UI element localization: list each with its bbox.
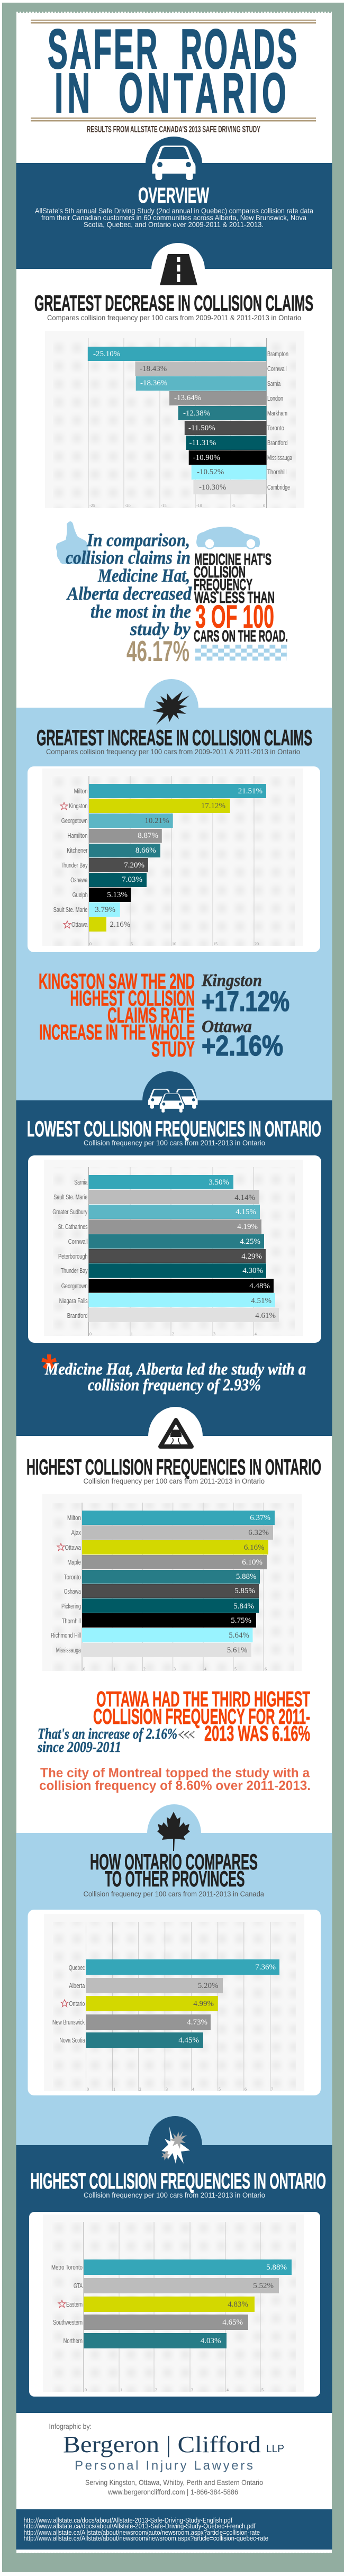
callout: collision frequency less than 3 of 100: COLLISION (194, 563, 246, 581)
overview text (35, 206, 313, 229)
callout: medicine hat led the study (41, 1346, 306, 1394)
bar chart: greatest decrease: -18.43% (140, 365, 167, 373)
bar chart: greatest increase: Kingston (69, 802, 87, 810)
callout: kingston second highest: CLAIMS RATE (107, 1003, 195, 1027)
callout: medicine hat decrease: study by (130, 619, 191, 639)
callout: montreal topped the study: collision frequency of 8.60% over 2011-2013. (39, 1778, 311, 1793)
callout: medicine hat decrease: collision claims in (66, 547, 191, 568)
bar chart: greatest decrease: -10.30% (199, 483, 226, 492)
callout: collision frequency less than 3 of 100 (194, 550, 288, 661)
callout: increase since 2009-2011: That's an increase of 2.16% (38, 1725, 177, 1742)
contact details: www.bergeronclifford.com | 1-866-384-5886 (107, 2488, 238, 2496)
callout: collision frequency less than 3 of 100: MEDICINE HAT'S (194, 550, 271, 568)
icon: white burst (148, 2116, 202, 2164)
bar chart: regions: Metro Toronto (51, 2263, 83, 2271)
bar chart: provinces: Ontario (69, 2000, 85, 2008)
bar chart: provinces: 3 (166, 2087, 168, 2092)
bar chart: highest frequencies: Toronto (64, 1573, 81, 1581)
bar chart: highest frequencies: Ajax (71, 1529, 81, 1536)
subheading: Compares collision frequency per 100 cars from 2009-2011 & 2011-2013 in Ontario (47, 313, 301, 322)
bar chart: highest frequencies: 5.61% (227, 1646, 248, 1655)
overview text: from their Canadian customers in 60 communities across Alberta, New Brunswick, Nova (41, 213, 306, 222)
source links: http://www.allstate.ca/Allstate/about/newsroom/auto/newsroom.aspx?article=collision-rate (24, 2528, 260, 2536)
bar chart: regions: Northern (64, 2337, 83, 2345)
bar chart: greatest increase (28, 766, 320, 952)
callout: medicine hat led the study: collision frequency of 2.93% (88, 1375, 261, 1394)
bar chart: lowest frequencies: 4.29% (241, 1252, 262, 1261)
bar chart: regions: 4.03% (201, 2337, 221, 2345)
callout: medicine hat decrease: 46.17% (126, 635, 189, 667)
title (31, 18, 316, 124)
bar chart: lowest frequencies: Thunder Bay (61, 1267, 88, 1275)
bar chart: greatest increase: 7.03% (122, 875, 142, 884)
bar chart: provinces: Quebec (69, 1964, 85, 1972)
bar chart: greatest increase: 0 (89, 942, 92, 946)
source links: http://www.allstate.ca/Allstate/about/newsroom/newsroom.aspx?article=collision-quebec-rate (24, 2534, 268, 2542)
bar chart: highest frequencies: Milton (67, 1514, 81, 1522)
callout: collision frequency less than 3 of 100: 3 OF 100 (195, 599, 274, 635)
bar chart: greatest decrease: -10.52% (197, 468, 224, 476)
callout: ottawa third highest (93, 1687, 310, 1746)
bar chart: greatest increase: 20 (255, 942, 259, 946)
bar chart: greatest decrease: Sarnia (267, 379, 281, 387)
logo: bergeron clifford (63, 2432, 284, 2473)
icon: side car (196, 527, 260, 548)
bar chart: greatest increase: 21.51% (238, 787, 262, 796)
bar chart: greatest increase: 10.21% (144, 817, 169, 825)
bar chart: greatest decrease: Markham (267, 409, 287, 417)
icon: car front (146, 137, 202, 180)
bar chart: highest frequencies: Oshawa (64, 1587, 81, 1595)
callout: montreal topped the study: The city of Montreal topped the study with a (40, 1766, 310, 1780)
icon: road (151, 243, 205, 285)
bar chart: greatest decrease: -18.36% (140, 379, 167, 387)
callout: kingston and ottawa increases: +17.12% (202, 986, 289, 1017)
logo: bergeron clifford: Bergeron | Clifford (63, 2432, 261, 2457)
bar chart: greatest decrease: Toronto (267, 424, 284, 432)
bar chart: provinces: 2 (139, 2087, 141, 2092)
bar chart: regions: 5.52% (253, 2282, 274, 2290)
bar chart: lowest frequencies: Greater Sudbury (52, 1208, 88, 1216)
bar chart: greatest increase: 10 (172, 942, 176, 946)
bar chart: provinces: 4.73% (187, 2018, 207, 2027)
callout: kingston and ottawa increases: Kingston (201, 971, 262, 990)
bar chart: lowest frequencies: 4.15% (236, 1208, 256, 1216)
bar chart: provinces: 5 (219, 2087, 221, 2092)
bar chart: lowest frequencies: Sault Ste. Marie (53, 1193, 87, 1201)
bar chart: highest frequencies: 5 (234, 1667, 237, 1671)
subheading: Collision frequency per 100 cars from 2011-2013 in Ontario (84, 2191, 265, 2199)
bar chart: greatest decrease: -20 (125, 503, 131, 508)
bar chart: highest frequencies: 6.16% (244, 1543, 265, 1552)
bar chart: greatest decrease: Cornwall (267, 365, 287, 373)
bar chart: highest frequencies: 2 (143, 1667, 146, 1671)
callout: collision frequency less than 3 of 100: FREQUENCY (194, 575, 252, 594)
bar chart: regions: Eastern (66, 2300, 83, 2308)
bar chart: highest frequencies: 5.75% (231, 1616, 251, 1625)
callout: kingston and ottawa increases: Ottawa (202, 1017, 252, 1036)
bar chart: greatest decrease: -11.50% (188, 424, 215, 432)
bar chart: highest frequencies: 5.85% (234, 1587, 255, 1595)
bar chart: greatest increase: 15 (213, 942, 218, 946)
bar chart: greatest decrease: Mississauga (267, 454, 293, 462)
bar chart: greatest decrease: London (267, 394, 283, 402)
bar chart: lowest frequencies: 1 (131, 1332, 133, 1336)
credit label: Infographic by: (49, 2422, 92, 2430)
bar chart: greatest decrease: -12.38% (183, 409, 210, 418)
bar chart: greatest increase: Thunder Bay (61, 861, 88, 869)
bar chart: greatest decrease: Brantford (267, 439, 288, 447)
bar chart: greatest decrease (45, 331, 304, 508)
bar chart: provinces: Alberta (69, 1982, 85, 1990)
bar chart: highest frequencies: Mississauga (56, 1646, 81, 1654)
logo: bergeron clifford: LLP (266, 2443, 284, 2455)
source links (24, 2516, 268, 2542)
bar chart: highest frequencies: 1 (113, 1667, 115, 1671)
callout: kingston second highest: INCREASE IN THE WHOLE (39, 1020, 195, 1044)
subheading: Collision frequency per 100 cars from 2011-2013 in Ontario (84, 1138, 265, 1147)
bar chart: provinces: 5.20% (198, 1982, 218, 1990)
callout: kingston second highest: KINGSTON SAW THE 2ND (39, 969, 195, 993)
bar chart: lowest frequencies: Peterborough (58, 1252, 88, 1260)
subheading: Collision frequency per 100 cars from 2011-2013 in Canada (84, 1890, 264, 1898)
bar chart: highest frequencies: 0 (83, 1667, 85, 1671)
source links: http://www.allstate.ca/docs/about/Allstate-2013-Safe-Driving-Study-English.pdf (24, 2516, 232, 2524)
bar chart: lowest frequencies: 4.61% (255, 1312, 276, 1320)
bar chart: lowest frequencies: Georgetown (61, 1282, 87, 1290)
bar chart: provinces: New Brunswick (52, 2018, 85, 2026)
bar chart: greatest increase: 2.16% (110, 920, 130, 929)
bar chart: provinces: Nova Scotia (59, 2036, 85, 2044)
overview text: AllState's 5th annual Safe Driving Study (2nd annual in Quebec) compares collision rate data (35, 206, 313, 215)
bar chart: lowest frequencies (28, 1155, 321, 1343)
bar chart: lowest frequencies: Brantford (67, 1312, 88, 1319)
callout: increase since 2009-2011: since 2009-2011 (37, 1739, 121, 1756)
bar chart: regions: 2 (155, 2388, 157, 2392)
bar chart: regions: 4.65% (222, 2318, 243, 2327)
bar chart: regions (29, 2212, 320, 2397)
bar chart: highest frequencies: 5.64% (229, 1631, 249, 1640)
contact details (85, 2478, 263, 2496)
callout: medicine hat decrease: In comparison, (86, 530, 190, 550)
bar chart: greatest decrease: -5 (232, 503, 236, 508)
bar chart: lowest frequencies: 4 (255, 1332, 257, 1336)
bar chart: greatest decrease: -25 (89, 503, 95, 508)
subheading: Compares collision frequency per 100 cars from 2009-2011 & 2011-2013 in Ontario (46, 747, 300, 756)
callout: kingston and ottawa increases (201, 971, 289, 1062)
bar chart: greatest increase: 7.20% (124, 861, 144, 870)
callout: increase since 2009-2011 (37, 1725, 194, 1756)
callout: montreal topped the study (39, 1766, 311, 1793)
bar chart: provinces: 7.36% (255, 1963, 276, 1972)
callout: medicine hat decrease: Medicine Hat, (97, 565, 190, 586)
bar chart: greatest increase: Sault Ste. Marie (53, 906, 88, 914)
bar chart: greatest increase: 8.66% (135, 846, 156, 855)
logo: bergeron clifford: Personal Injury Lawyers (75, 2459, 253, 2473)
callout: collision frequency less than 3 of 100: WAS LESS THAN (194, 588, 275, 607)
bar chart: greatest decrease: -25.10% (93, 350, 120, 358)
bar chart: regions: 5 (261, 2388, 264, 2392)
bar chart: provinces: 0 (87, 2087, 89, 2092)
source links: http://www.allstate.ca/docs/about/Allstate-2013-Safe-Driving-Study-Quebec-French.pdf (24, 2522, 256, 2530)
bar chart: highest frequencies: 4 (204, 1667, 206, 1671)
bar chart: regions: GTA (74, 2282, 83, 2290)
bar chart: regions: 1 (120, 2388, 122, 2392)
bar chart: highest frequencies: 6.10% (242, 1558, 262, 1567)
bar chart: highest frequencies: 5.84% (233, 1602, 254, 1611)
bar chart: highest frequencies: 6.32% (248, 1529, 269, 1537)
bar chart: greatest increase: Milton (74, 787, 88, 795)
bar chart: highest frequencies: Thornhill (62, 1617, 81, 1625)
callout: kingston second highest: STUDY (151, 1037, 195, 1061)
bar chart: regions: 4.83% (228, 2300, 248, 2309)
bar chart: greatest increase: Hamilton (68, 831, 88, 839)
bar chart: greatest increase: Kitchener (67, 846, 88, 854)
bar chart: lowest frequencies: 0 (89, 1332, 92, 1336)
icon: thumbs up (56, 521, 88, 564)
bar chart: highest frequencies: Maple (68, 1558, 81, 1566)
icon: dotted arrows (179, 1731, 194, 1738)
bar chart: lowest frequencies: 3.50% (209, 1178, 229, 1187)
icon: slippery road warning (148, 1407, 203, 1447)
bar chart: highest frequencies: Richmond Hill (51, 1631, 81, 1639)
bar chart: lowest frequencies: 4.48% (249, 1282, 270, 1290)
bar chart: lowest frequencies: St. Catharines (58, 1223, 88, 1231)
bar chart: regions: 5.88% (266, 2263, 287, 2272)
bar chart: greatest increase: 17.12% (201, 802, 225, 810)
bar chart: lowest frequencies: 2 (172, 1332, 174, 1336)
bar chart: greatest increase: Oshawa (70, 876, 88, 884)
bar chart: regions: 3 (191, 2388, 193, 2392)
bar chart: greatest decrease: -10.90% (193, 454, 220, 462)
bar chart: lowest frequencies: Niagara Falls (59, 1297, 88, 1305)
bar chart: greatest decrease: -15 (161, 503, 167, 508)
icon: three cars (142, 1071, 198, 1113)
bar chart: lowest frequencies: 4.25% (240, 1237, 260, 1246)
bar chart: greatest increase: Guelph (73, 891, 88, 899)
contact details: Serving Kingston, Ottawa, Whitby, Perth and Eastern Ontario (85, 2478, 263, 2487)
bar chart: greatest decrease: -13.64% (174, 394, 201, 402)
callout: medicine hat led the study: Medicine Hat, Alberta led the study with a (44, 1359, 306, 1378)
bar chart: greatest increase: 5 (131, 942, 133, 946)
bar chart: highest frequencies: Ottawa (65, 1543, 82, 1551)
heading: how ontario compares (90, 1849, 258, 1891)
bar chart: highest frequencies: 6.37% (250, 1514, 270, 1522)
bar chart: regions: Southwestern (53, 2318, 83, 2326)
callout: kingston and ottawa increases: +2.16% (202, 1030, 283, 1062)
overview text: Scotia, Quebec, and Ontario over 2009-2011 & 2011-2013. (84, 220, 264, 229)
bar chart: provinces: 4 (192, 2087, 194, 2092)
heading: overview: OVERVIEW (138, 183, 209, 207)
callout: medicine hat led the study: * (41, 1346, 57, 1390)
bar chart: greatest increase: 3.79% (95, 906, 115, 914)
bar chart: greatest decrease: -11.31% (189, 439, 216, 447)
callout: medicine hat decrease: the most in the (90, 601, 191, 622)
bar chart: greatest increase: Georgetown (61, 817, 87, 825)
bar chart: greatest decrease: -10 (196, 503, 202, 508)
bar chart: greatest decrease: Brampton (267, 350, 288, 358)
bar chart: highest frequencies: 5.88% (236, 1572, 257, 1581)
bar chart: lowest frequencies: 4.14% (234, 1194, 255, 1202)
bar chart: provinces: 6 (245, 2087, 247, 2092)
bar chart: provinces: 7 (271, 2087, 273, 2092)
bar chart: greatest decrease: Thornhill (267, 468, 287, 476)
callout: kingston second highest: HIGHEST COLLISION (70, 986, 195, 1010)
bar chart: lowest frequencies: Sarnia (74, 1178, 88, 1186)
bar chart: provinces (28, 1910, 321, 2095)
bar chart: lowest frequencies: 4.30% (242, 1267, 263, 1275)
icon: maple leaf (147, 1804, 201, 1851)
bar chart: highest frequencies (42, 1494, 302, 1671)
bar chart: lowest frequencies: 4.19% (237, 1223, 258, 1231)
panel: overview (35, 137, 313, 229)
bar chart: provinces: 4.45% (178, 2036, 199, 2045)
bar chart: regions: 4 (227, 2388, 229, 2392)
bar chart: greatest decrease: 0 (263, 503, 265, 508)
bar chart: greatest decrease: Cambridge (267, 483, 290, 491)
bar chart: highest frequencies: Pickering (61, 1602, 81, 1610)
bar chart: provinces: 4.99% (193, 2000, 214, 2008)
bar chart: highest frequencies: 6 (265, 1667, 267, 1671)
bar chart: lowest frequencies: 4.51% (251, 1297, 271, 1305)
bar chart: greatest increase: 5.13% (107, 891, 128, 899)
icon: collision burst (144, 679, 198, 725)
subheading: Collision frequency per 100 cars from 2011-2013 in Ontario (84, 1477, 265, 1485)
bar chart: greatest increase: 8.87% (138, 831, 158, 840)
bar chart: greatest increase: Ottawa (71, 920, 88, 928)
callout: kingston second highest (39, 969, 195, 1061)
bar chart: highest frequencies: 3 (174, 1667, 176, 1671)
bar chart: regions: 0 (85, 2388, 87, 2392)
panel: credits (49, 2422, 284, 2496)
callout: medicine hat decrease (66, 530, 192, 667)
callout: medicine hat decrease: Alberta decreased (66, 583, 192, 604)
bar chart: lowest frequencies: Cornwall (68, 1237, 88, 1245)
bar chart: provinces: 1 (113, 2087, 115, 2092)
bar chart: lowest frequencies: 3 (213, 1332, 215, 1336)
